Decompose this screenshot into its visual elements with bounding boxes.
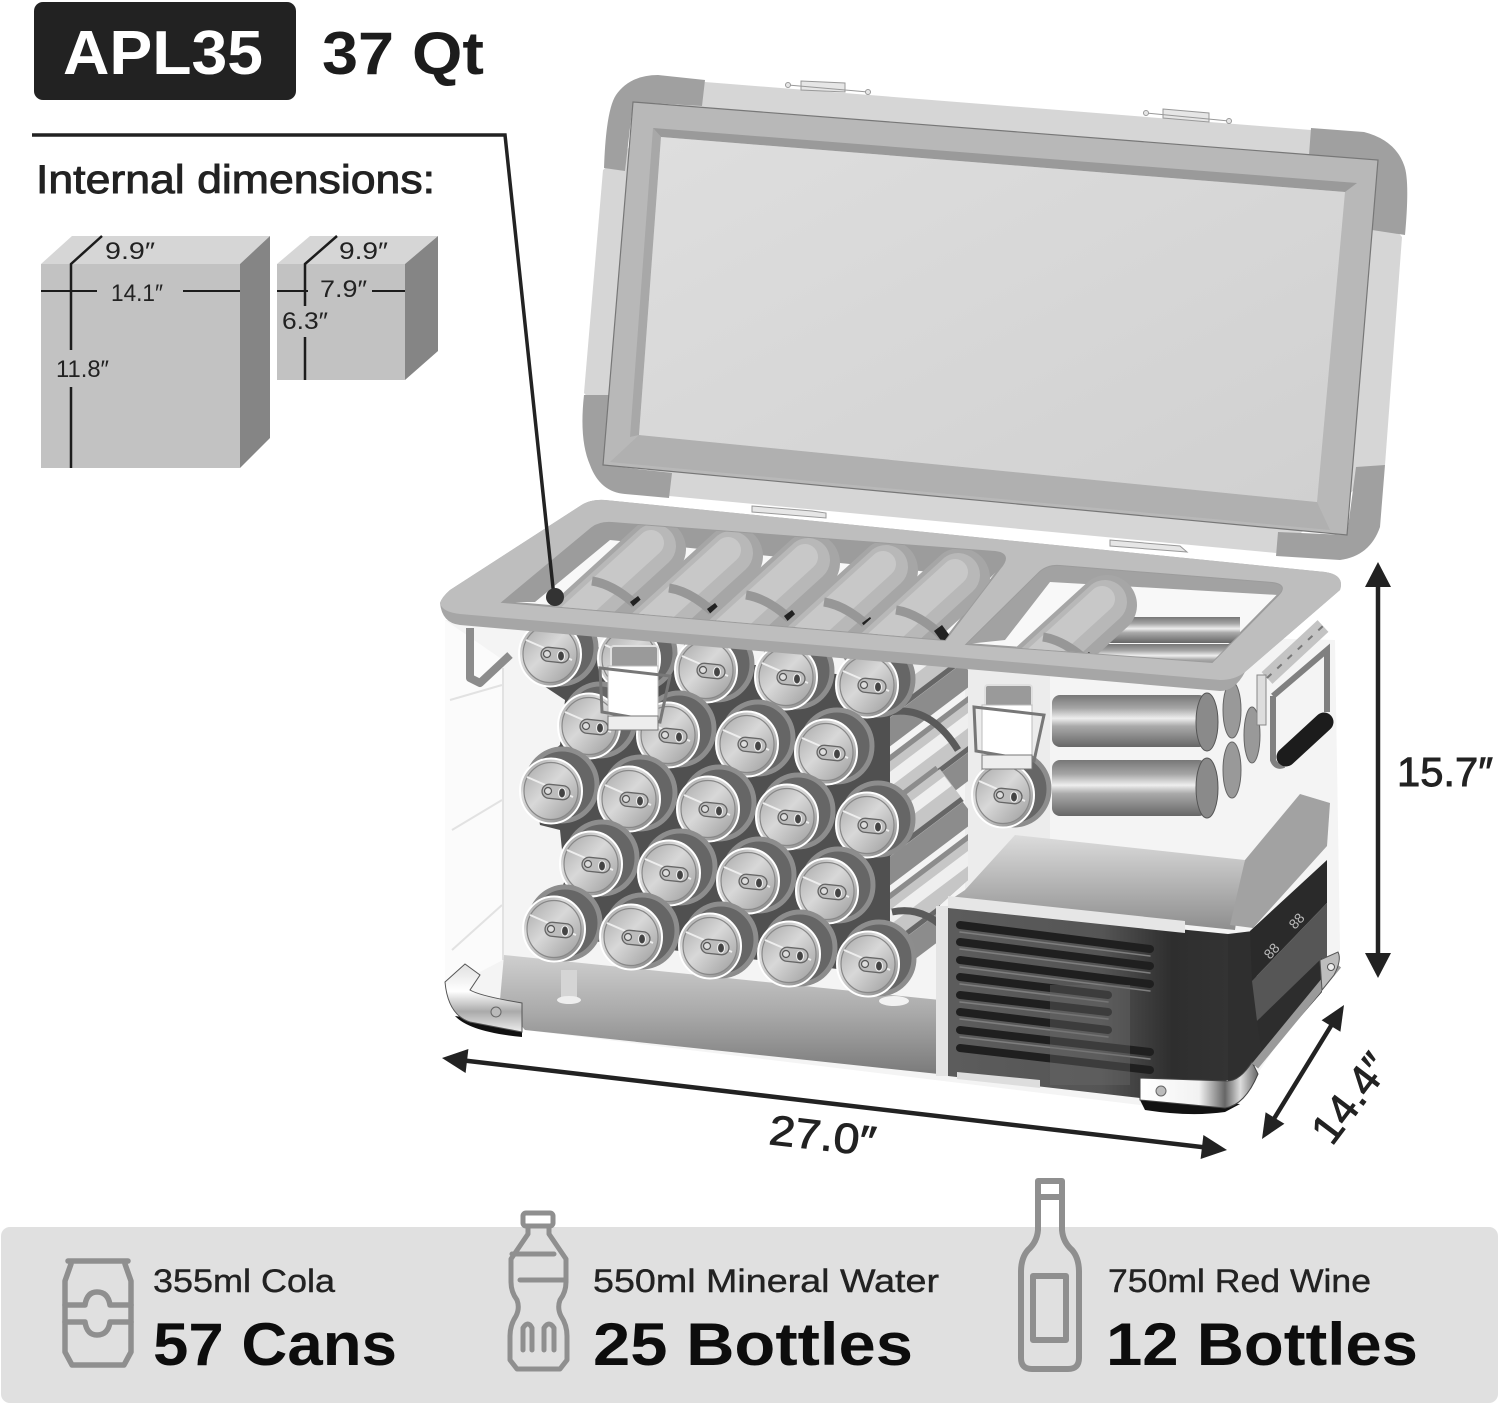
opening: small compartment <box>965 565 1283 663</box>
open lid <box>582 75 1407 560</box>
text: wine capacity: 750ml Red Wine <box>1108 1263 1371 1299</box>
capacity panel <box>1 1181 1498 1403</box>
can bodies side view <box>844 658 968 958</box>
small compartment cube <box>277 236 438 380</box>
opening: main compartment <box>500 522 1006 641</box>
lid hinges <box>752 81 1232 552</box>
model badge <box>34 2 296 100</box>
text: water capacity: 25 Bottles <box>593 1311 913 1378</box>
rim front edge and top <box>440 500 1341 691</box>
icon: wine bottle <box>1021 1181 1079 1369</box>
text: wine capacity <box>1106 1263 1418 1378</box>
model badge: APL35 <box>63 19 263 88</box>
floor tray <box>500 794 1330 1075</box>
side electronics panel: 88 <box>1285 910 1308 932</box>
icon: water bottle <box>510 1213 567 1369</box>
depth label: 14.4″ <box>1302 1044 1399 1152</box>
text: water capacity <box>593 1263 939 1378</box>
leader line to compartment <box>32 135 564 606</box>
width label: 27.0″ <box>767 1106 879 1165</box>
left handle <box>470 628 510 683</box>
large compartment cube: 14.1″ <box>111 280 163 307</box>
right section horizontal cans <box>1052 682 1260 818</box>
dark gaps behind stacked cans <box>530 640 890 975</box>
small compartment cube: 7.9″ <box>320 276 368 303</box>
capacity heading: 37 Qt <box>322 20 484 87</box>
large compartment cube: 11.8″ <box>56 356 109 383</box>
side electronics panel: 88 <box>1260 940 1283 962</box>
height arrow <box>1365 562 1391 978</box>
cooler illustration <box>440 75 1407 1114</box>
internal dimensions heading: Internal dimensions: <box>36 158 435 202</box>
transparent cooler body <box>445 620 1340 1105</box>
small compartment cube: 9.9″ <box>339 238 389 265</box>
front latch right <box>974 685 1044 769</box>
lid inner panel <box>639 137 1345 502</box>
text: wine capacity: 12 Bottles <box>1106 1311 1418 1378</box>
front latch left <box>600 646 670 730</box>
text: cola capacity: 355ml Cola <box>153 1263 335 1299</box>
right handle <box>1257 626 1327 766</box>
bottom left corner guard <box>445 964 522 1037</box>
large compartment cube: 9.9″ <box>105 238 156 265</box>
bottom right corner guard <box>1140 952 1339 1114</box>
depth arrow <box>1262 1005 1344 1139</box>
height label: 15.7″ <box>1397 749 1493 795</box>
compartment vents <box>960 925 1150 1070</box>
text: cola capacity: 57 Cans <box>153 1311 397 1378</box>
small compartment cube: 6.3″ <box>282 308 329 335</box>
text: water capacity: 550ml Mineral Water <box>593 1263 939 1299</box>
lid gasket <box>603 102 1378 535</box>
side electronics panel <box>1228 860 1327 1085</box>
icon: can <box>65 1261 131 1365</box>
large compartment cube <box>41 236 270 468</box>
stacked cans end-on <box>519 612 1049 996</box>
compressor compartment <box>936 896 1228 1098</box>
text: cola capacity <box>153 1263 397 1378</box>
width arrow <box>442 1049 1227 1159</box>
